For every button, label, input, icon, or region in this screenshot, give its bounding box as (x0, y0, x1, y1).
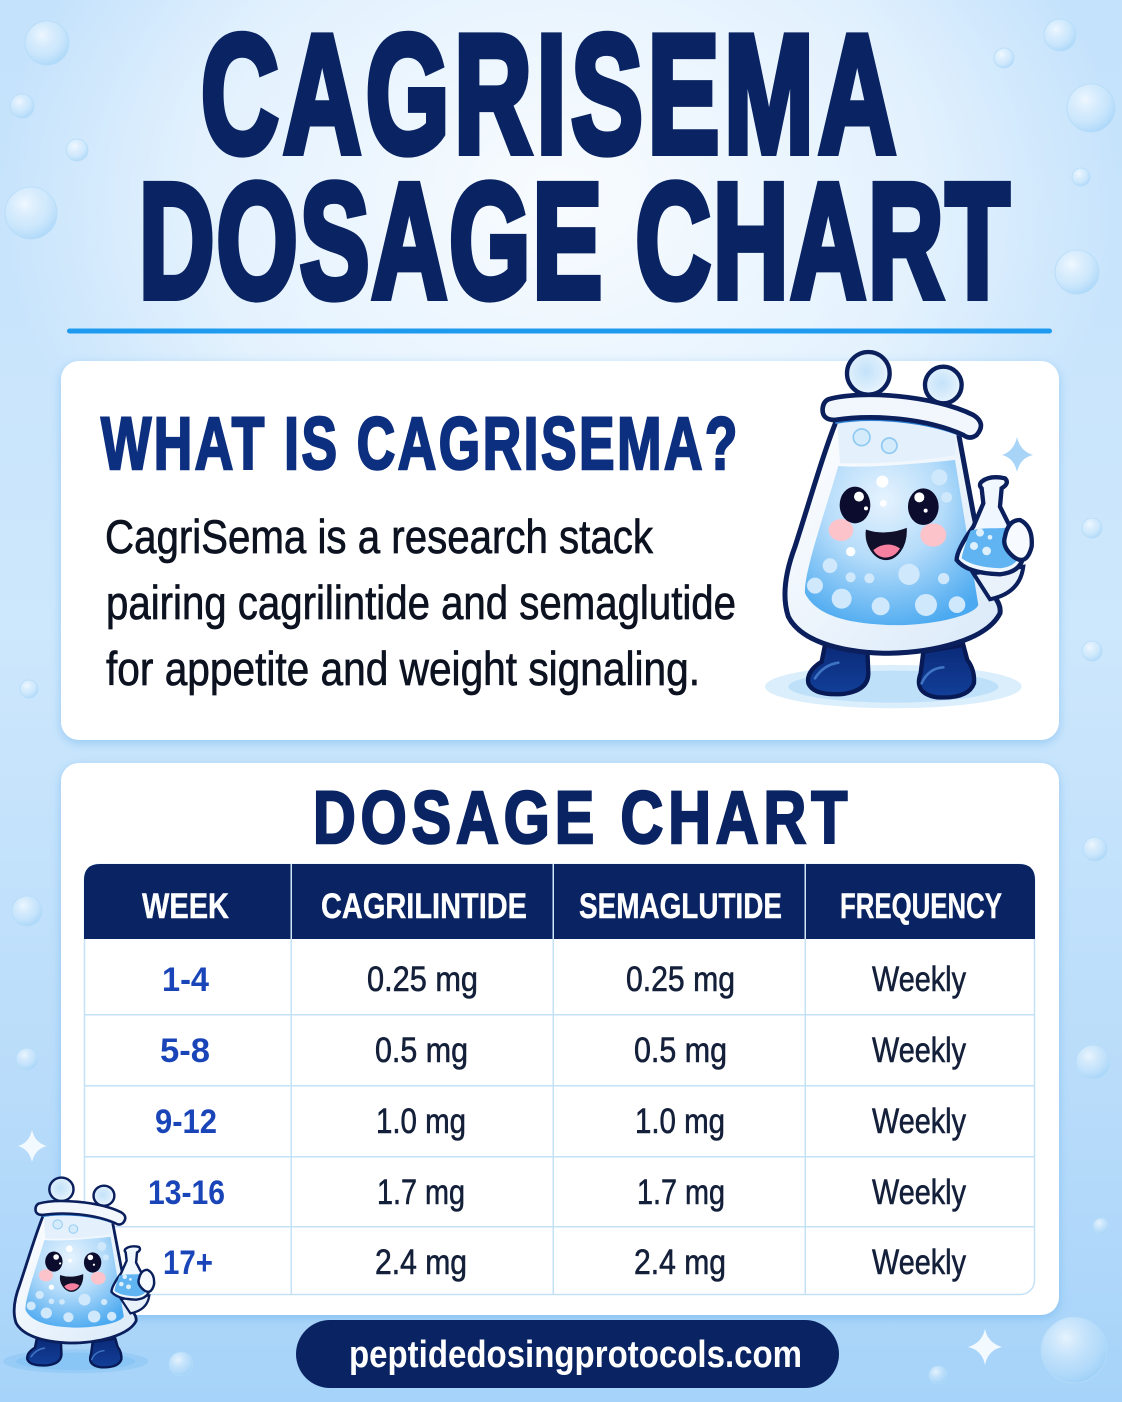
column: cagrilintide: 1.7 mg (377, 1173, 465, 1212)
column: week: 9-12 (155, 1103, 217, 1141)
description text: CagriSema is a research stack (105, 510, 653, 563)
description text: for appetite and weight signaling. (106, 642, 700, 695)
panel: what is cagrisema (61, 361, 1059, 740)
table header row: CAGRILINTIDE (321, 887, 527, 926)
table (84, 864, 1035, 1295)
column: frequency: Weekly (872, 1102, 966, 1141)
column: frequency: Weekly (872, 1243, 966, 1282)
column: semaglutide: 2.4 mg (634, 1243, 726, 1282)
column: week: 13-16 (148, 1174, 225, 1212)
column: frequency: Weekly (872, 1031, 966, 1070)
column: cagrilintide: 2.4 mg (375, 1243, 467, 1282)
icon: flask mascot small (3, 1178, 154, 1373)
description text (105, 510, 736, 695)
column: cagrilintide (367, 960, 478, 1282)
heading: what is cagrisema: WHAT IS CAGRISEMA? (101, 402, 737, 485)
footer url pill (296, 1320, 839, 1388)
title: DOSAGE CHART (139, 149, 1009, 332)
column: semaglutide (626, 960, 735, 1282)
column: cagrilintide: 0.25 mg (367, 960, 478, 999)
table header row: FREQUENCY (840, 887, 1002, 926)
heading: dosage chart: DOSAGE CHART (313, 777, 847, 860)
table header row: WEEK (142, 887, 229, 926)
table header row: SEMAGLUTIDE (579, 887, 782, 926)
column: semaglutide: 1.0 mg (635, 1102, 725, 1141)
title underline (67, 328, 1052, 334)
column: cagrilintide: 1.0 mg (376, 1102, 466, 1141)
column: semaglutide: 0.5 mg (634, 1031, 727, 1070)
icon: sparkle near mascot (1002, 437, 1033, 472)
icon: flask mascot large (765, 352, 1032, 708)
table header row (84, 864, 1035, 939)
description text: pairing cagrilintide and semaglutide (106, 576, 736, 629)
title (139, 0, 1009, 332)
icon: sparkle bottom right (968, 1329, 1002, 1365)
column: week: 1-4 (162, 961, 209, 999)
icon: sparkle left (18, 1130, 47, 1162)
column: week: 5-8 (160, 1032, 210, 1070)
footer url pill: peptidedosingprotocols.com (349, 1334, 802, 1376)
column: cagrilintide: 0.5 mg (375, 1031, 468, 1070)
column: semaglutide: 0.25 mg (626, 960, 735, 999)
panel: dosage chart (61, 763, 1059, 1315)
column: frequency (872, 960, 966, 1282)
column: week (148, 961, 225, 1282)
column: semaglutide: 1.7 mg (637, 1173, 725, 1212)
column: frequency: Weekly (872, 960, 966, 999)
column: frequency: Weekly (872, 1173, 966, 1212)
column: week: 17+ (163, 1244, 213, 1282)
title: CAGRISEMA (201, 0, 896, 188)
